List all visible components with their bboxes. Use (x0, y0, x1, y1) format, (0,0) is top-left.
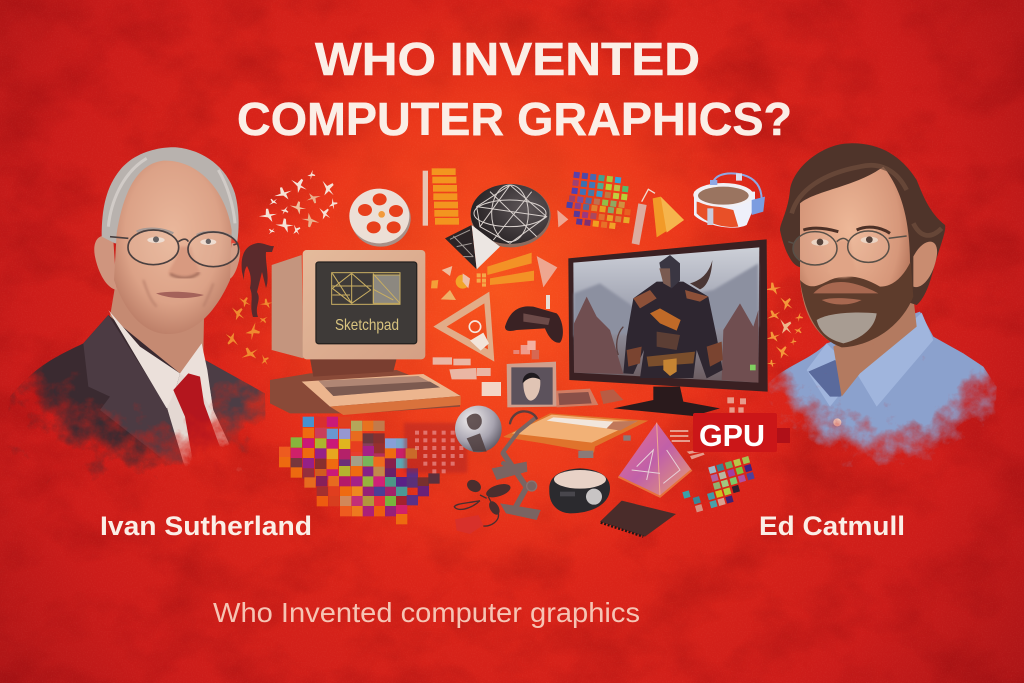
portrait: Ivan Sutherland (0, 147, 272, 483)
collar (807, 313, 933, 407)
gamepad (505, 295, 563, 343)
title: WHO INVENTED (315, 33, 700, 85)
status light (750, 365, 756, 370)
memory chip (600, 501, 676, 537)
hair highlights (108, 158, 235, 227)
pendant lamp (632, 189, 684, 245)
face (800, 167, 910, 347)
orange rays (477, 253, 534, 287)
wireframe drawing (332, 273, 400, 304)
folded pyramid (445, 225, 500, 269)
right collar (180, 343, 213, 412)
articulated lamp arm (503, 411, 537, 508)
name label: Ed Catmull: Ed Catmull (759, 511, 905, 541)
wooden desk (503, 413, 648, 458)
necktie (173, 373, 222, 470)
portrait frame (507, 362, 557, 407)
right lapel (205, 360, 266, 470)
left lapel (83, 315, 187, 473)
moustache and lips (813, 282, 878, 304)
white bird flock (257, 170, 340, 237)
rock spires (574, 297, 758, 383)
monitor stand (613, 387, 720, 416)
paper cards (433, 357, 501, 396)
orange birds left (223, 296, 275, 367)
faint halftone square grid (404, 423, 467, 473)
suit jacket (8, 315, 220, 482)
glasses (788, 231, 907, 265)
faint blocks (513, 341, 539, 359)
VR headset (693, 173, 765, 228)
hair top shading (792, 165, 942, 235)
orange bars chart (423, 168, 459, 226)
neck (833, 297, 917, 397)
small triangles and pie (431, 266, 470, 300)
center items group three (454, 387, 746, 537)
game screen (573, 247, 759, 383)
center items group one (270, 168, 551, 415)
monitor stand (310, 358, 397, 377)
armored knight (617, 255, 723, 378)
pale triangles (557, 210, 568, 227)
puck scanner device (549, 468, 610, 513)
beard (800, 262, 913, 347)
sketchpad screen label: Sketchpad (335, 317, 399, 334)
left collar (108, 310, 180, 408)
GPU label (693, 413, 790, 453)
face (114, 161, 232, 334)
portrait: Ed Catmull (768, 143, 997, 467)
caption: Who Invented computer graphics (213, 597, 640, 628)
small tilted pixel grid (678, 456, 759, 515)
globe sphere (455, 406, 502, 452)
monitor side (272, 255, 303, 358)
name label: Ivan Sutherland: Ivan Sutherland (100, 511, 312, 541)
top colour pixel grid (564, 171, 635, 231)
pale ray triangle (537, 256, 557, 287)
ear (913, 242, 937, 287)
orange birds right (763, 279, 804, 369)
center items group two (505, 173, 768, 407)
eyes and brows (803, 227, 890, 277)
right ear (227, 243, 240, 280)
blue shirt (768, 312, 997, 467)
button (833, 418, 841, 426)
crystal prism (618, 423, 692, 497)
GPU label: GPU (699, 418, 765, 453)
dark creature silhouette (242, 243, 274, 317)
large multicolour pixel mosaic (279, 417, 440, 524)
retro computer: base keyboard (270, 370, 461, 415)
facial features (137, 229, 232, 307)
lamp bases (492, 462, 541, 520)
hair (102, 147, 239, 243)
monitor front (303, 250, 425, 359)
neck (110, 287, 204, 375)
monitor screen (316, 262, 417, 344)
shirt shadow (808, 360, 842, 397)
glasses (110, 230, 239, 267)
triangle frame (433, 292, 494, 362)
gaming monitor frame (568, 239, 768, 392)
wireframe dome (471, 184, 551, 247)
grey chin beard (817, 312, 877, 343)
left ear (94, 236, 117, 290)
title (237, 33, 792, 145)
small stripes (670, 397, 746, 459)
shirt (167, 373, 242, 472)
title: COMPUTER GRAPHICS? (237, 93, 792, 145)
hair back (780, 143, 945, 305)
mouse cable peripherals (454, 477, 512, 534)
distant mountains (574, 263, 758, 337)
film reel (349, 189, 411, 247)
small keyboard (557, 389, 623, 407)
